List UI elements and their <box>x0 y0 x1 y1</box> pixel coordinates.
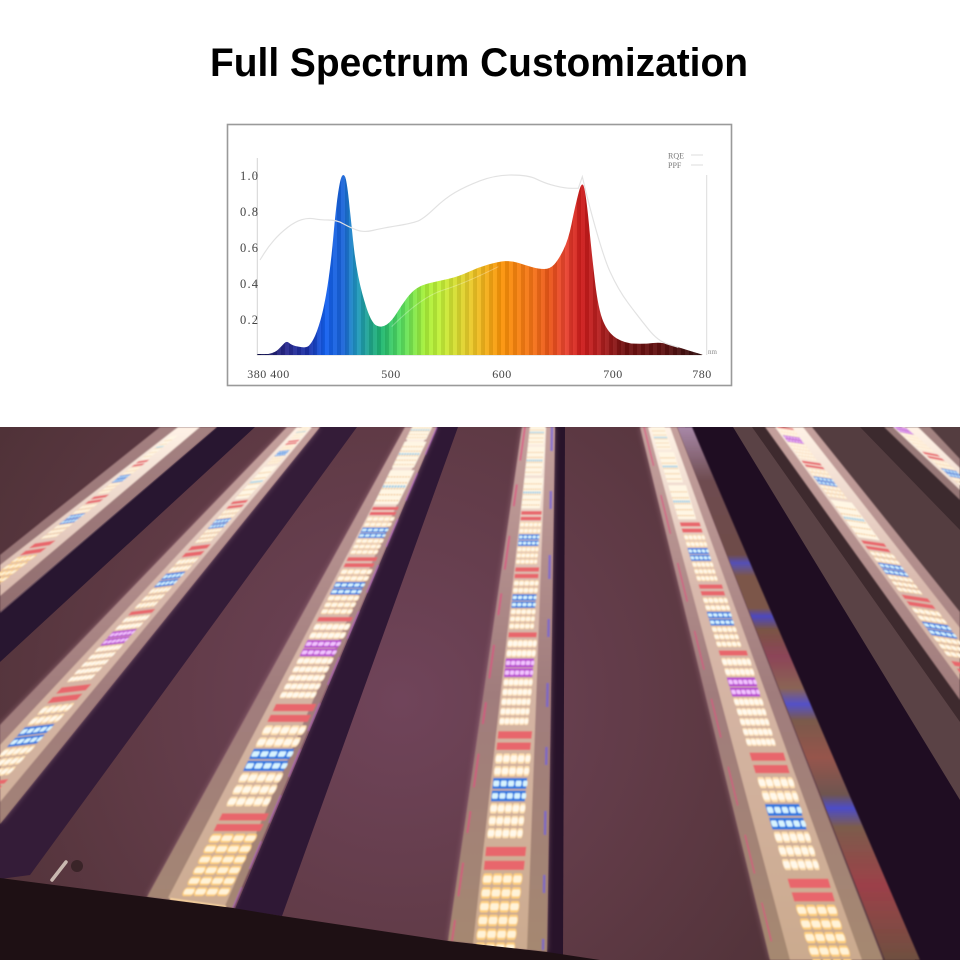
sloped wall band <box>733 427 960 800</box>
x axis labels: 780 <box>692 367 712 381</box>
x axis labels <box>247 367 712 381</box>
bar F <box>765 427 960 721</box>
legend: RQE and PPF <box>668 152 703 170</box>
bar B <box>0 425 320 832</box>
bar E <box>640 426 883 960</box>
y axis labels: 0.4 <box>240 277 259 291</box>
legend: RQE and PPF: RQE <box>668 152 684 160</box>
shadow of bar A <box>0 427 255 662</box>
x axis labels: 400 <box>270 367 290 381</box>
shadow of bar D <box>547 427 565 957</box>
shadow strip under bar F <box>752 427 960 722</box>
unit label: nm <box>708 348 718 356</box>
y axis labels: 0.2 <box>240 313 259 327</box>
soft bar glow <box>0 427 883 960</box>
x axis labels: 500 <box>381 367 401 381</box>
bar G <box>884 427 960 500</box>
bar D <box>448 422 555 952</box>
dark recess on the right <box>685 427 960 960</box>
y axis labels: 0.6 <box>240 241 259 255</box>
chart axes <box>254 158 707 355</box>
shadow strip under bar G <box>860 427 960 530</box>
x axis labels: 600 <box>492 367 512 381</box>
y axis labels <box>240 169 259 327</box>
photo: LED grow light bars on ceiling <box>0 417 960 960</box>
side stripe of bar E <box>677 427 920 960</box>
y axis labels: 0.8 <box>240 205 259 219</box>
spectrum area chart <box>257 175 702 355</box>
shadow of bar B <box>0 427 357 879</box>
foreground dark beam <box>0 878 600 960</box>
legend: RQE and PPF: PPF <box>668 161 682 170</box>
bar A <box>0 427 217 613</box>
panel: spectrum chart <box>228 124 732 386</box>
x axis labels: 380 <box>247 367 267 381</box>
shadow of bar C <box>235 427 458 916</box>
bar C <box>147 421 437 908</box>
x axis labels: 700 <box>603 367 623 381</box>
upper right wall <box>780 427 960 662</box>
title: Full Spectrum Customization <box>210 41 748 85</box>
metal hook <box>52 860 83 880</box>
y axis labels: 1.0 <box>240 169 259 183</box>
